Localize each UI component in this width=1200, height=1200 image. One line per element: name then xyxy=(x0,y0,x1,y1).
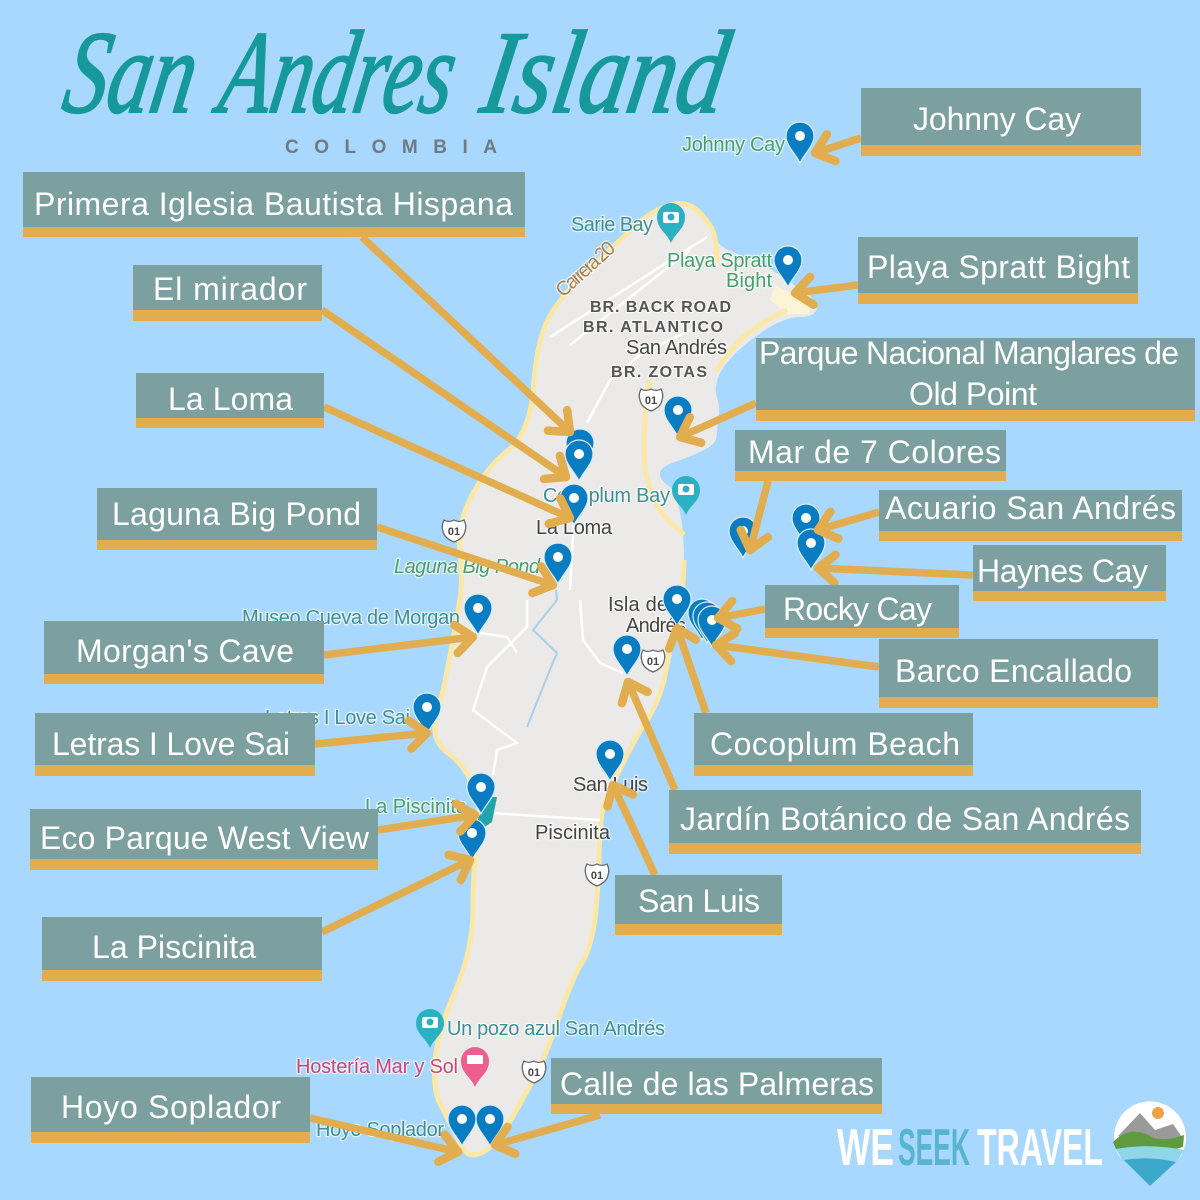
icon: camera pin Sarie Bay xyxy=(657,203,685,243)
map place labels: Letras I Love Sai xyxy=(265,707,410,729)
label: Johnny Cay xyxy=(861,88,1141,156)
label: El mirador: El mirador xyxy=(153,271,307,307)
subtitle: COLOMBIA xyxy=(285,137,497,158)
icon: hotel pin xyxy=(461,1047,489,1087)
map place labels: Bight xyxy=(726,270,772,292)
map place labels: Playa Spratt xyxy=(667,250,772,272)
label: Laguna Big Pond: Laguna Big Pond xyxy=(112,496,361,532)
route 01 shields: 01 xyxy=(647,656,659,668)
label: Cocoplum Beach xyxy=(694,713,973,776)
icon: camera pin Un pozo azul xyxy=(416,1009,444,1048)
map place labels: San Luis xyxy=(573,774,648,796)
label: Barco Encallado: Barco Encallado xyxy=(895,653,1132,689)
label: Playa Spratt Bight xyxy=(858,237,1138,304)
label: Rocky Cay xyxy=(765,585,959,638)
map place labels: Laguna Big Pond xyxy=(394,556,541,578)
map place labels xyxy=(242,134,785,1141)
label: Mar de 7 Colores: Mar de 7 Colores xyxy=(748,434,1001,470)
north town area xyxy=(770,285,812,314)
label: San Luis: San Luis xyxy=(638,883,760,919)
label: Cocoplum Beach: Cocoplum Beach xyxy=(710,726,960,762)
label: Morgan's Cave: Morgan's Cave xyxy=(76,633,294,669)
route 01 shields: 01 xyxy=(645,395,657,407)
route 01 shields: 01 xyxy=(528,1067,540,1079)
label: Barco Encallado xyxy=(879,639,1158,708)
label: Rocky Cay: Rocky Cay xyxy=(783,591,932,627)
label: Parque Nacional Manglares de Old Point: Old Point xyxy=(909,376,1037,412)
label: Mar de 7 Colores xyxy=(735,430,1006,481)
logo wordmark: WE xyxy=(837,1119,894,1177)
label: Primera Iglesia Bautista Hispana: Primera Iglesia Bautista Hispana xyxy=(34,186,513,222)
label: Eco Parque West View: Eco Parque West View xyxy=(40,820,370,856)
label: Hoyo Soplador xyxy=(31,1077,310,1143)
map place labels: Museo Cueva de Morgan xyxy=(242,607,460,629)
logo wordmark: SEEK xyxy=(898,1119,970,1177)
label: La Piscinita xyxy=(42,917,322,981)
label: Parque Nacional Manglares de Old Point xyxy=(756,335,1195,421)
map place labels: Carrera 20 xyxy=(552,237,620,302)
logo icon: mountain and water drop xyxy=(1113,1101,1186,1186)
map place labels: Hoyo Soplador xyxy=(316,1119,444,1141)
label: Jardín Botánico de San Andrés xyxy=(669,790,1141,854)
label: Laguna Big Pond xyxy=(97,488,377,550)
label: La Loma: La Loma xyxy=(168,381,293,417)
map place labels: La Loma xyxy=(536,517,613,539)
map place labels: Johnny Cay xyxy=(682,134,785,156)
map place labels: La Piscinita xyxy=(365,796,468,818)
title xyxy=(55,7,739,138)
label: Haynes Cay: Haynes Cay xyxy=(977,553,1148,589)
label: Jardín Botánico de San Andrés: Jardín Botánico de San Andrés xyxy=(680,801,1130,837)
label: Acuario San Andrés: Acuario San Andrés xyxy=(885,490,1176,526)
location pins xyxy=(413,122,825,1146)
map of the island xyxy=(242,134,817,1155)
label: Hoyo Soplador: Hoyo Soplador xyxy=(61,1089,281,1125)
label: Letras I Love Sai: Letras I Love Sai xyxy=(52,726,290,762)
title: Island xyxy=(473,7,739,138)
label: Playa Spratt Bight: Playa Spratt Bight xyxy=(867,249,1130,285)
label: Calle de las Palmeras xyxy=(551,1058,882,1114)
map place labels: San Andrés xyxy=(626,337,727,359)
label: Acuario San Andrés xyxy=(879,490,1182,541)
label: Johnny Cay: Johnny Cay xyxy=(913,101,1081,137)
label: Letras I Love Sai xyxy=(35,713,315,776)
title: San xyxy=(55,7,209,138)
map place labels: Sarie Bay xyxy=(571,214,653,236)
title: Andres xyxy=(207,7,467,138)
label: Morgan's Cave xyxy=(44,621,324,684)
arrows from labels to pins xyxy=(310,138,973,1152)
route 01 shields xyxy=(442,389,665,1083)
logo wordmark: TRAVEL xyxy=(977,1119,1103,1177)
map place labels: Andrés xyxy=(626,615,686,637)
label: Primera Iglesia Bautista Hispana xyxy=(23,172,525,237)
label: La Loma xyxy=(136,373,324,428)
map place labels: BR. BACK ROAD xyxy=(590,299,733,316)
label: La Piscinita: La Piscinita xyxy=(92,929,256,965)
map place labels: Cocoplum Bay xyxy=(543,485,670,507)
map place labels: Hostería Mar y Sol xyxy=(296,1056,458,1078)
map place labels: BR. ZOTAS xyxy=(611,364,709,381)
icon: teal park marker at La Piscinita xyxy=(476,797,497,830)
label: Haynes Cay xyxy=(973,545,1166,601)
island land mass xyxy=(435,204,817,1155)
label: Eco Parque West View xyxy=(30,809,378,870)
logo wordmark xyxy=(837,1119,1103,1177)
map place labels: Isla de xyxy=(608,594,668,616)
label: Parque Nacional Manglares de Old Point: Parque Nacional Manglares de xyxy=(759,335,1179,371)
map place labels: Un pozo azul San Andrés xyxy=(447,1018,665,1040)
route 01 shields: 01 xyxy=(591,870,603,882)
label: San Luis xyxy=(615,875,782,935)
map place labels: Piscinita xyxy=(535,822,611,844)
inner roads and streets xyxy=(473,237,707,820)
pin centre dots xyxy=(422,131,816,1124)
label: El mirador xyxy=(133,265,322,321)
icon: camera pin Cocoplum Bay xyxy=(672,476,700,515)
map place labels: BR. ATLANTICO xyxy=(583,319,725,336)
label: Calle de las Palmeras: Calle de las Palmeras xyxy=(560,1066,874,1102)
stream xyxy=(527,590,557,727)
route 01 shields: 01 xyxy=(448,526,460,538)
coastal road xyxy=(435,204,787,1155)
